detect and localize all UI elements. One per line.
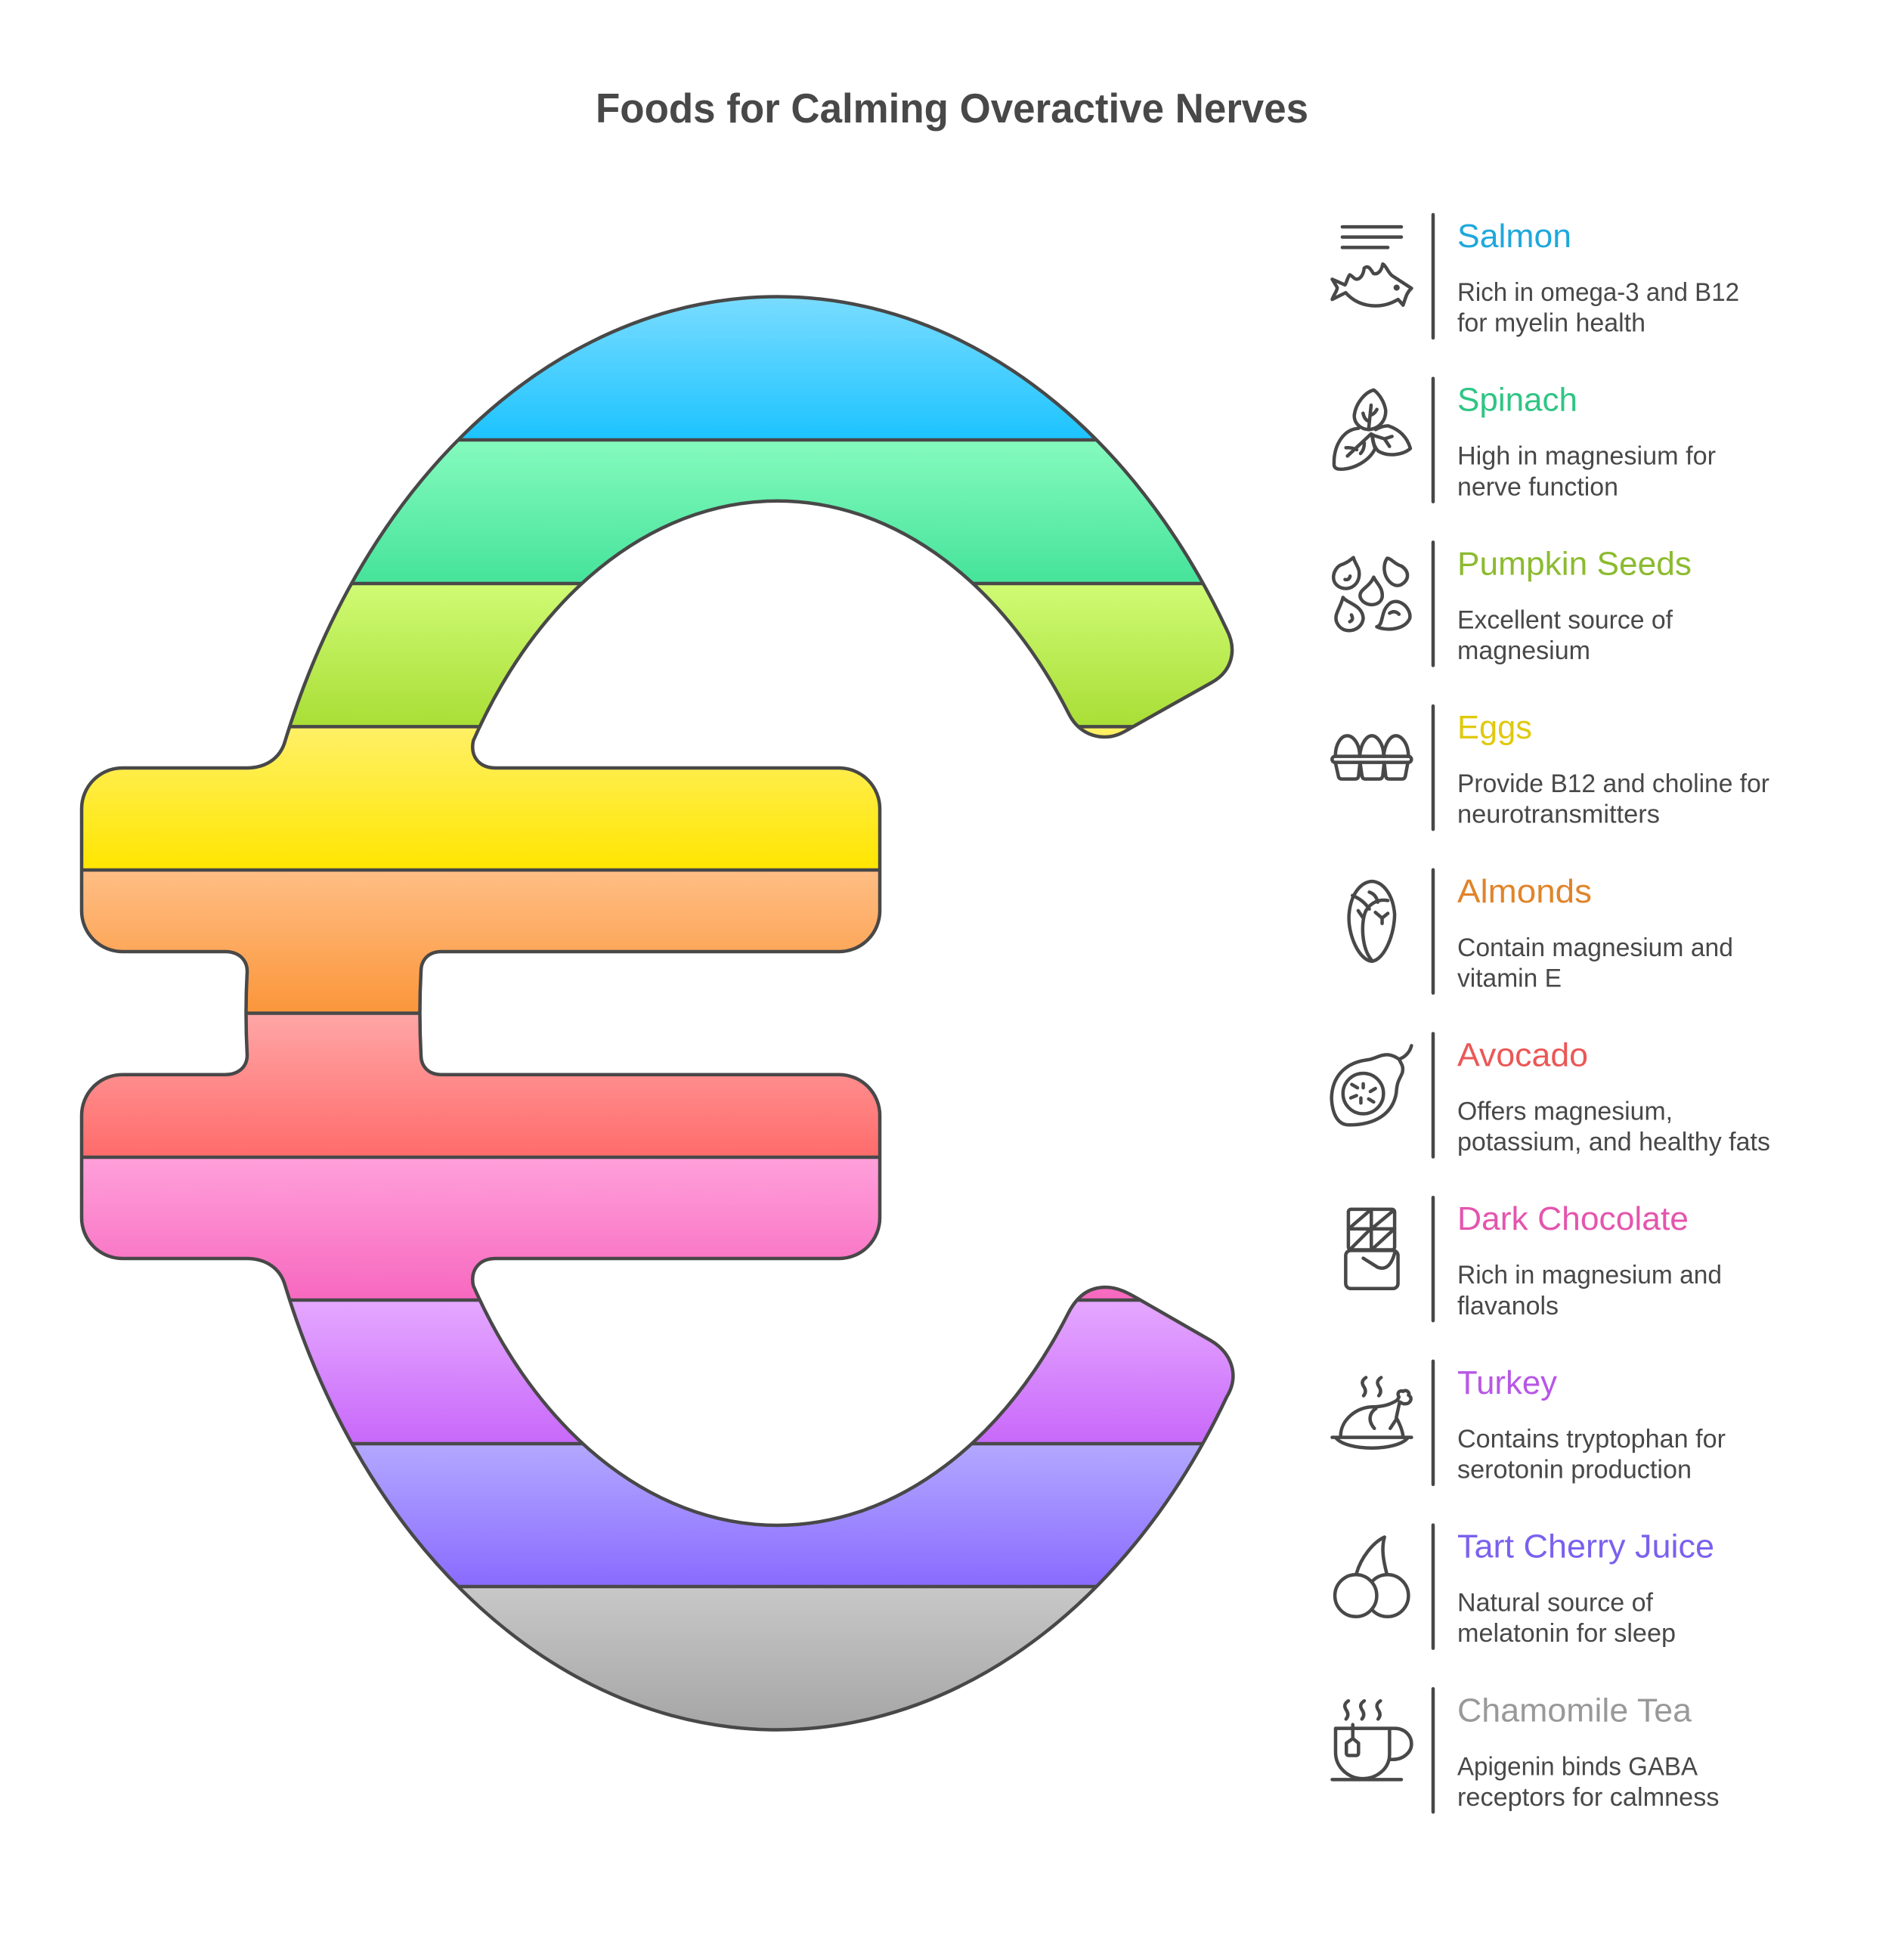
heading: Eggs: [1457, 709, 1532, 746]
heading: Almonds: [1457, 873, 1592, 910]
item: eggs: [1332, 706, 1769, 829]
item: chamomile tea: [1332, 1689, 1719, 1812]
description: serotonin production: [1457, 1456, 1692, 1485]
description: [1457, 278, 1739, 338]
heading: Chamomile Tea: [1457, 1692, 1692, 1729]
description: High in magnesium for: [1457, 442, 1716, 471]
description: Contains tryptophan for: [1457, 1425, 1726, 1454]
description: Provide B12 and choline for: [1457, 769, 1769, 798]
description: [1457, 1589, 1676, 1648]
description: potassium, and healthy fats: [1457, 1128, 1770, 1156]
band: spinach: [354, 441, 1200, 582]
band: eggs: [83, 729, 1127, 868]
icon: avocado: [1332, 1045, 1411, 1125]
description: receptors for calmness: [1457, 1783, 1719, 1812]
icon: fish: [1332, 227, 1411, 306]
band: salmon: [463, 298, 1093, 438]
description: melatonin for sleep: [1457, 1619, 1676, 1648]
icon: cherries: [1335, 1537, 1408, 1617]
title: Foods for Calming Overactive Nerves: [596, 85, 1308, 132]
description: [1457, 769, 1769, 829]
heading: Turkey: [1457, 1364, 1557, 1401]
heading: Avocado: [1457, 1037, 1588, 1073]
description: neurotransmitters: [1457, 800, 1660, 829]
description: [1457, 1752, 1719, 1812]
description: magnesium: [1457, 636, 1590, 665]
icon: chocolate bar: [1345, 1209, 1398, 1289]
item: almonds: [1349, 870, 1733, 993]
description: [1457, 1425, 1726, 1485]
band: pumpkin seeds: [292, 585, 1231, 726]
description: [1457, 1261, 1722, 1320]
band: chamomile tea: [463, 1588, 1092, 1728]
band: almonds: [83, 872, 878, 1011]
icon: almond: [1349, 881, 1395, 961]
description: flavanols: [1457, 1292, 1559, 1320]
icon: spinach leaves: [1334, 390, 1410, 469]
item: spinach: [1334, 379, 1716, 502]
heading: Spinach: [1457, 382, 1577, 419]
heading: Tart Cherry Juice: [1457, 1528, 1714, 1565]
description: Rich in omega-3 and B12: [1457, 278, 1739, 307]
description: Contain magnesium and: [1457, 933, 1733, 962]
band: avocado: [83, 1014, 878, 1156]
description: [1457, 1098, 1770, 1156]
description: [1457, 933, 1733, 992]
item: pumpkin seeds: [1333, 542, 1692, 665]
icon: seeds: [1333, 558, 1410, 630]
description: Excellent source of: [1457, 605, 1673, 634]
description: Offers magnesium,: [1457, 1098, 1673, 1126]
item: tart cherry juice: [1335, 1525, 1714, 1649]
description: nerve function: [1457, 472, 1618, 501]
description: Rich in magnesium and: [1457, 1261, 1722, 1289]
heading: Pumpkin Seeds: [1457, 545, 1692, 582]
icon: roast turkey: [1332, 1377, 1411, 1448]
band: dark chocolate: [83, 1159, 1134, 1299]
description: vitamin E: [1457, 964, 1562, 992]
heading: Dark Chocolate: [1457, 1200, 1689, 1237]
description: [1457, 442, 1716, 501]
band: tart cherry juice: [355, 1445, 1200, 1585]
euro symbol chart: [68, 296, 1247, 1731]
icon: tea cup: [1332, 1701, 1411, 1779]
heading: Salmon: [1457, 218, 1571, 255]
description: [1457, 605, 1673, 665]
item: turkey: [1332, 1361, 1726, 1485]
euro outline: [82, 297, 1233, 1729]
item: dark chocolate: [1345, 1197, 1722, 1320]
description: Apigenin binds GABA: [1457, 1752, 1698, 1781]
icon: egg carton: [1332, 735, 1411, 779]
description: Natural source of: [1457, 1589, 1654, 1618]
item: avocado: [1332, 1034, 1770, 1156]
band: turkey: [292, 1302, 1232, 1442]
item: salmon: [1332, 215, 1739, 338]
description: for myelin health: [1457, 309, 1645, 338]
